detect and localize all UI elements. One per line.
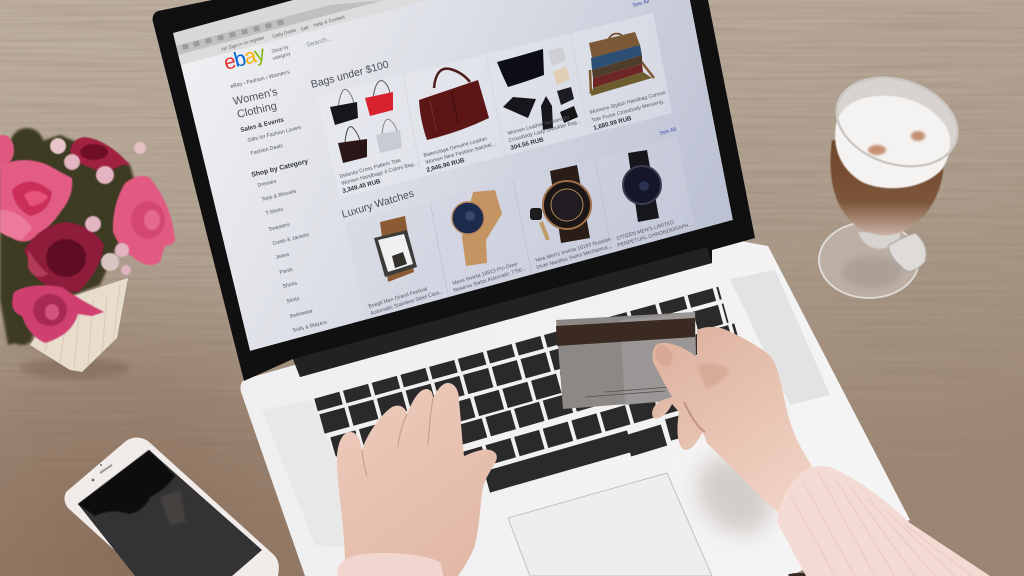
bag captions: 3,349.45 RUB — [342, 178, 382, 195]
credit card — [556, 312, 696, 409]
left category menu: eBay › Fashion › Women's — [230, 69, 291, 90]
bag captions — [339, 90, 668, 195]
grey tote — [376, 119, 402, 153]
left category menu: Sweaters — [268, 222, 291, 233]
left category menu: Clothing — [236, 100, 278, 121]
heading: Bags under $100: Bags under $100 — [310, 59, 390, 91]
black messenger bag — [497, 49, 544, 87]
white vase — [30, 278, 128, 372]
burgundy bag — [419, 69, 489, 140]
laptop screen: online store page — [173, 0, 733, 351]
bag captions: Women Leather Messenger — [507, 115, 571, 137]
black tote — [330, 89, 358, 125]
left category menu: Suits & Blazers — [292, 320, 328, 334]
watch captions: Boegli Men Grand Festival — [368, 286, 428, 310]
gold bracelet watch — [452, 190, 502, 266]
left category menu: Dresses — [257, 178, 277, 189]
browser chrome: Hi! Sign in or register — [221, 35, 266, 53]
glass bowl upper — [825, 63, 969, 181]
laptop lid and bezel — [153, 0, 755, 381]
glass rim — [825, 63, 969, 181]
watch captions: New Men's Invicta 16193 Russian — [535, 237, 612, 264]
left category menu: Sales & Events — [240, 116, 285, 134]
striped canvas bag — [589, 32, 654, 96]
watch captions: Reserve Swiss Automatic 7750... — [453, 266, 527, 294]
left category menu: Skirts — [286, 296, 300, 305]
bag captions: Womens Stylish Handbag Canvas — [589, 90, 667, 116]
browser chrome: Sell — [300, 25, 309, 33]
left category menu: Shorts — [282, 280, 298, 290]
thumbnail — [652, 343, 676, 369]
card fine print — [585, 387, 670, 397]
browser chrome: Shop by — [271, 44, 290, 55]
left category menu: T-Shirts — [265, 207, 284, 217]
colour swatch bags — [548, 47, 578, 123]
see all links — [632, 0, 677, 137]
watch product cards — [366, 150, 694, 320]
right speaker grille — [730, 270, 830, 405]
bag captions: Balenciaga Genuine Leather — [423, 136, 488, 159]
black and gold diver watch — [530, 165, 591, 243]
watch captions: Mens Invicta 18913 Pro Diver — [452, 261, 519, 287]
black clutch — [503, 97, 536, 118]
bag captions: Women Handbags 4 Colors Bag... — [341, 161, 418, 187]
coffee glass — [819, 63, 969, 298]
bag captions: Delaney Cross Pattern Tote — [339, 158, 402, 180]
glass foot — [819, 222, 926, 298]
left sleeve cuff — [337, 553, 443, 576]
bag captions: Women New Fashion Satchel... — [425, 141, 497, 166]
left speaker grille — [262, 400, 372, 550]
browser chrome: Help & Contact — [313, 14, 346, 29]
coffee body — [830, 140, 944, 235]
rose: large pink left — [0, 160, 72, 242]
left category menu: Coats & Jackets — [272, 232, 310, 247]
magnetic stripe — [556, 318, 695, 346]
keyboard keys — [316, 293, 737, 496]
bag captions: 1,680.99 RUB — [593, 115, 633, 132]
milk foam — [835, 96, 950, 188]
left category menu: Women's — [232, 86, 279, 108]
moss filler — [0, 128, 140, 345]
bag captions: 2,946.96 RUB — [426, 157, 466, 174]
left category menu: Tops & Blouses — [261, 188, 298, 203]
trackpad — [508, 473, 712, 576]
watch captions: CITIZEN MEN'S LIMITED — [616, 220, 675, 242]
laptop base — [240, 240, 910, 576]
browser chrome — [173, 0, 430, 65]
phone on the table — [64, 438, 279, 576]
phone screen — [78, 450, 262, 576]
heading: Luxury Watches: Luxury Watches — [340, 187, 415, 221]
tan strap watch — [374, 216, 417, 282]
ebay logo: ebay — [221, 42, 268, 75]
pink knit sleeve — [777, 466, 990, 576]
rose: top dark — [0, 135, 130, 171]
hand shadow on base — [682, 441, 788, 549]
watch captions: Automatic Stainless Steel Cara... — [370, 289, 444, 317]
black chronograph watch — [623, 150, 661, 222]
left category menu: Fashion Deals — [250, 143, 284, 157]
red tote — [365, 81, 393, 116]
rose: center dark red — [24, 222, 104, 292]
bag product cards — [317, 13, 672, 198]
watch captions: PERPETUAL CHRONOGRAPH ... — [617, 221, 695, 249]
browser chrome: category — [272, 51, 292, 62]
bag captions: Crossbody Lady Shoulder Bag... — [508, 119, 582, 144]
watch captions — [368, 220, 695, 317]
phone earpiece — [92, 464, 112, 481]
watch captions: Diver Nautilus Swiss Mechanica... — [536, 244, 613, 271]
cinnamon spots — [868, 131, 925, 155]
rose: right pink — [113, 176, 175, 265]
right hand holding card — [652, 327, 812, 512]
black wristlet — [541, 96, 553, 130]
browser chrome: Daily Deals — [272, 27, 297, 40]
left category menu — [230, 69, 328, 334]
left category menu: Pants — [279, 267, 294, 276]
bag captions: 304.56 RUB — [510, 136, 545, 152]
left category menu: Gifts for Fashion Lovers — [247, 125, 302, 144]
small pale blossoms — [50, 138, 146, 275]
left category menu: Shop by Category — [251, 158, 309, 179]
bag captions: Tote Purse Crossbody Messeng... — [591, 98, 668, 124]
rose: bottom pink — [12, 285, 104, 343]
dark brown tote — [338, 127, 367, 163]
browser chrome: Search... — [306, 35, 333, 49]
left hand typing — [337, 383, 497, 576]
see all links: See All — [659, 127, 677, 137]
left category menu: Swimwear — [289, 308, 314, 320]
left category menu: Jeans — [275, 252, 290, 261]
flower pot — [0, 128, 175, 378]
